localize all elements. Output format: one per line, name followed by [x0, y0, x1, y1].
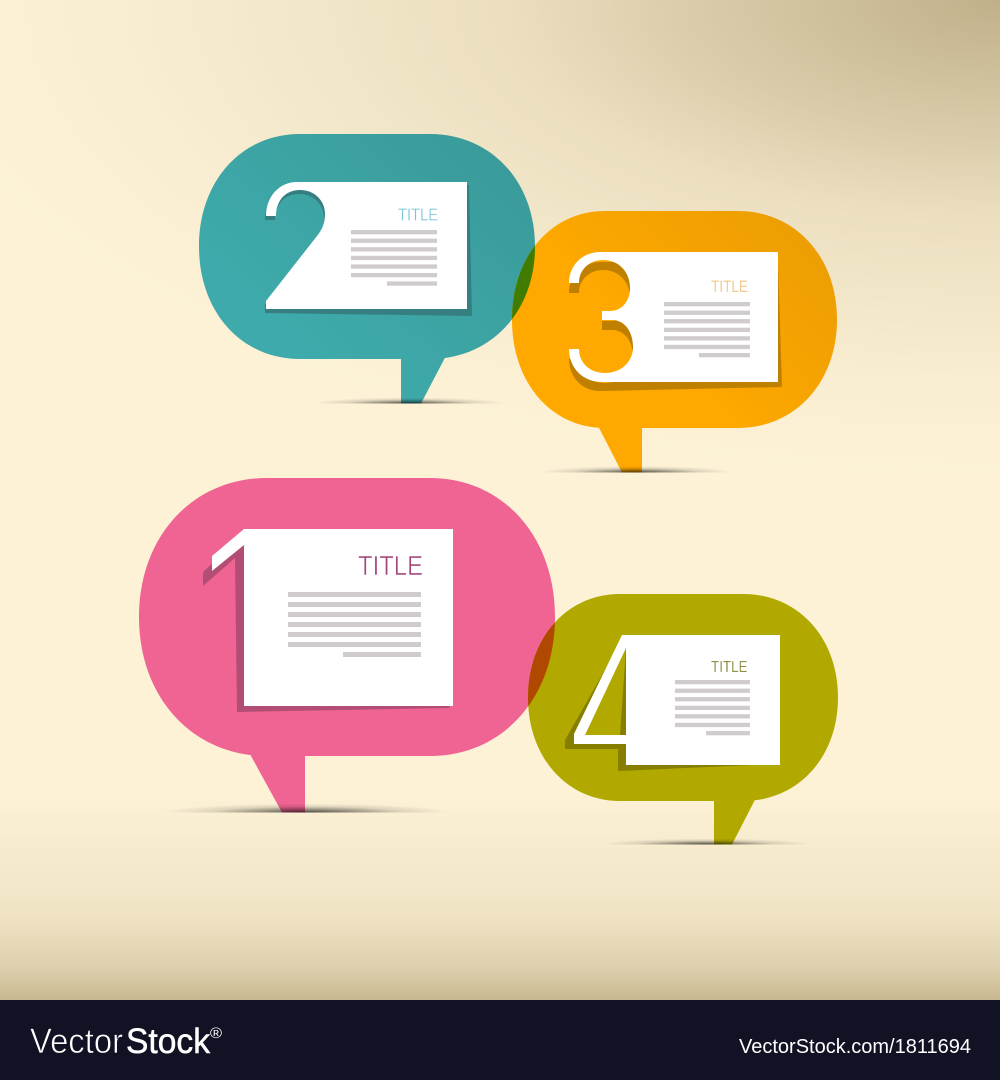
panel: step 2 teal bubble [199, 134, 535, 404]
title: TITLE [711, 278, 748, 296]
card shadow: orange [569, 262, 782, 391]
logo: VectorStock: Stock [126, 1021, 210, 1061]
logo: VectorStock: ® [210, 1025, 222, 1042]
title: TITLE [711, 659, 748, 676]
text lines [664, 302, 750, 357]
bubble shape: olive [528, 594, 838, 844]
text lines [351, 230, 437, 286]
text lines [288, 592, 421, 657]
bubble shape: pink [139, 478, 555, 812]
image id link text: VectorStock.com/1811694 [739, 1036, 971, 1058]
text lines [675, 680, 750, 735]
logo: VectorStock: Vector [30, 1021, 123, 1061]
overlap: pink and olive [528, 622, 555, 706]
panel: step 3 orange bubble [512, 211, 837, 472]
card shadow: teal [265, 185, 472, 316]
logo: VectorStock [30, 1021, 222, 1061]
card with number 3 [569, 252, 778, 382]
tail shadow: olive [600, 838, 813, 844]
card shadow: olive [565, 648, 753, 771]
card with number 4 [574, 635, 780, 765]
tail shadow: teal [312, 398, 507, 404]
title: TITLE [398, 204, 438, 224]
overlap: teal and orange [512, 246, 535, 320]
footer bar [0, 1000, 1000, 1080]
tail shadow: orange [538, 466, 735, 472]
card shadow: pink [203, 535, 453, 712]
panel: step 4 olive bubble [528, 594, 838, 844]
card with number 2 [266, 182, 467, 309]
bubble shape: orange [512, 211, 837, 472]
title: TITLE [358, 550, 423, 581]
card with number 1 [212, 529, 453, 706]
tail shadow: pink [163, 804, 450, 812]
bubble shape: teal [199, 134, 535, 404]
panel: step 1 pink bubble [139, 478, 555, 812]
